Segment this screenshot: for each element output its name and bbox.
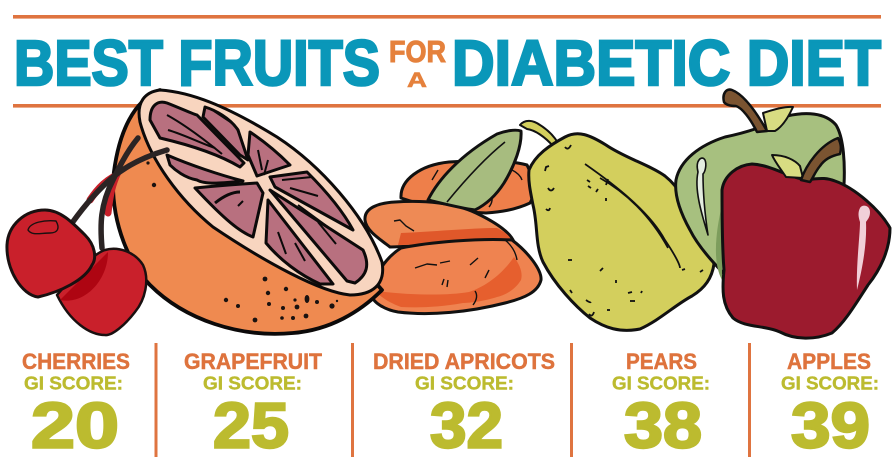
column: apples xyxy=(781,349,879,462)
column dividers xyxy=(154,343,751,457)
illustration: dried apricots xyxy=(365,161,541,314)
illustration: pear xyxy=(520,121,714,330)
column: pears: GI SCORE: xyxy=(612,374,710,394)
column: dried apricots: DRIED APRICOTS xyxy=(373,349,555,374)
column: apples: GI SCORE: xyxy=(781,374,879,394)
column: cherries xyxy=(22,349,130,462)
column: grapefruit: GRAPEFRUIT xyxy=(184,349,322,374)
column: cherries: CHERRIES xyxy=(22,349,130,374)
column: cherries: GI SCORE: xyxy=(24,374,123,394)
segment xyxy=(150,102,244,167)
title xyxy=(14,27,881,99)
column: dried apricots: 32 xyxy=(430,390,503,462)
icon: red apple leaf xyxy=(772,155,803,178)
icon: red apple stem xyxy=(801,138,841,182)
title: FOR xyxy=(389,34,446,69)
illustration: grapefruit xyxy=(113,90,383,334)
title: A xyxy=(407,69,427,92)
icon: back cherry xyxy=(57,249,146,335)
column: cherries: 20 xyxy=(31,390,119,462)
column: pears: PEARS xyxy=(626,349,697,374)
icon: green apple leaf xyxy=(763,107,793,131)
illustration: cherries xyxy=(7,138,167,335)
illustration: red apple xyxy=(722,138,890,338)
illustration: pear leaf xyxy=(428,130,521,210)
column: dried apricots: GI SCORE: xyxy=(415,374,514,394)
icon: front cherry xyxy=(7,210,95,297)
column: pears xyxy=(612,349,710,462)
icon: green apple stem xyxy=(723,90,767,132)
column: apples: APPLES xyxy=(787,349,871,374)
illustration: green apple xyxy=(676,90,844,290)
column: grapefruit: 25 xyxy=(213,390,289,462)
column: pears: 38 xyxy=(624,390,702,462)
column: grapefruit: GI SCORE: xyxy=(203,374,302,394)
column: apples: 39 xyxy=(791,390,870,462)
icon: cherry stems xyxy=(72,138,167,248)
title: BEST FRUITS xyxy=(14,27,380,99)
column: grapefruit xyxy=(184,349,322,462)
column: dried apricots xyxy=(373,349,555,462)
